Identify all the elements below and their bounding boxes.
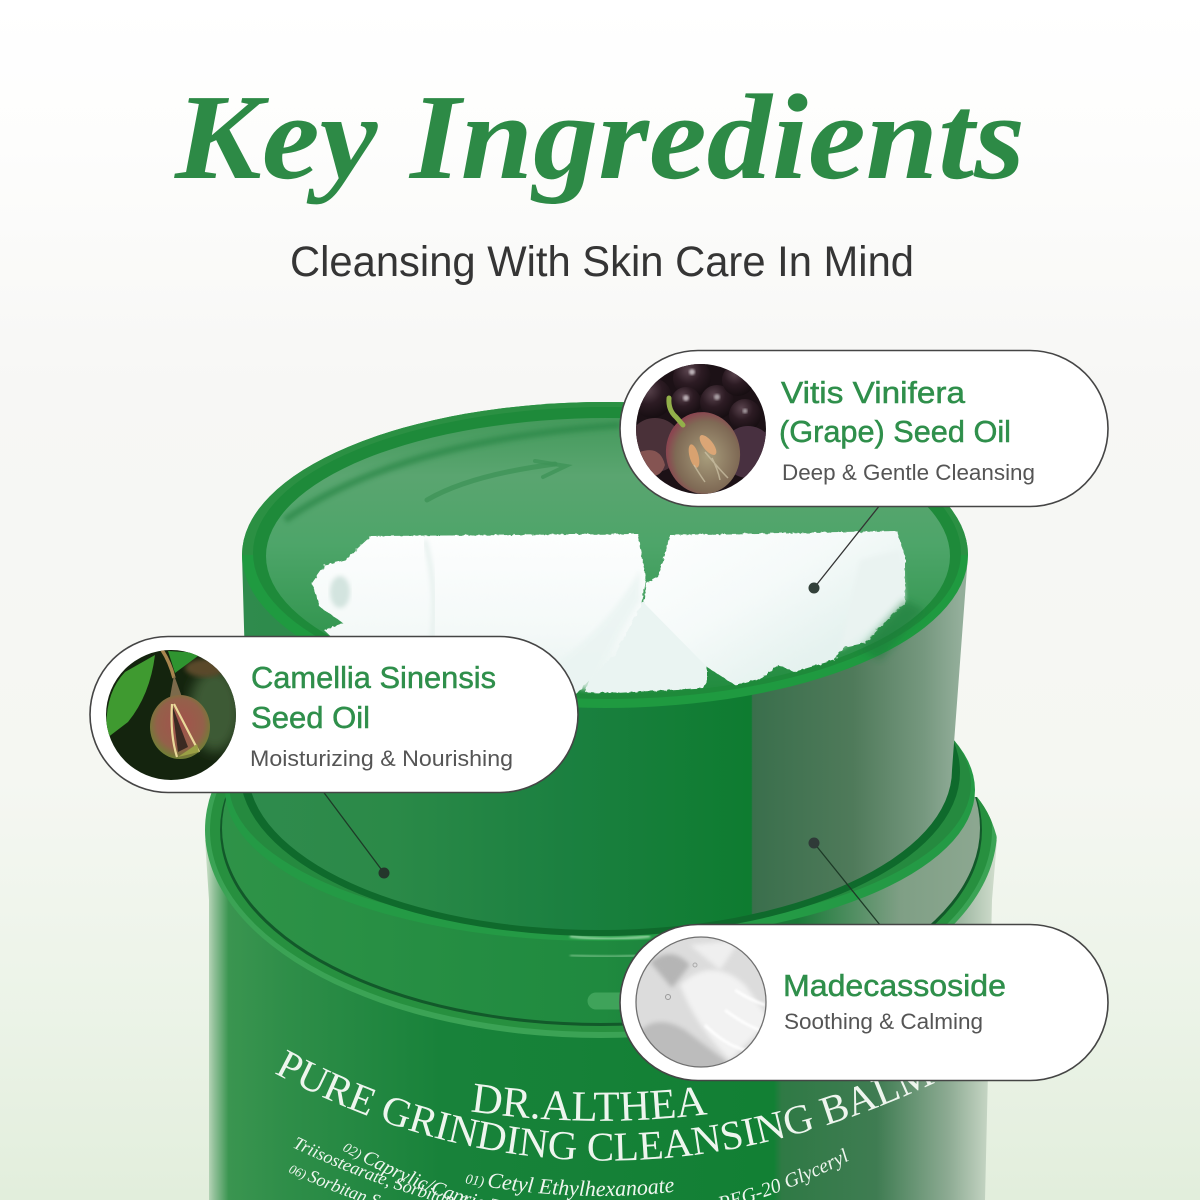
inner floor — [266, 418, 950, 694]
callout: camellia seed oil — [90, 636, 578, 792]
subtitle: Cleansing With Skin Care In Mind — [290, 238, 914, 286]
upper jar body — [242, 555, 968, 930]
ingredient list: 01) Cetyl Ethylhexanoate — [466, 1174, 674, 1200]
benefit: Moisturizing & Nourishing — [250, 746, 513, 771]
jar neck ring — [225, 639, 975, 941]
product name: PURE GRINDING CLEANSING BALM — [275, 1050, 935, 1161]
lower jar body — [205, 840, 997, 1200]
title: Key Ingredients — [174, 70, 1025, 205]
balm folds — [330, 540, 925, 690]
embossed arrow — [427, 461, 566, 500]
balm chunks — [312, 531, 905, 693]
icon: cream texture photo — [636, 937, 770, 1075]
benefit: Soothing & Calming — [784, 1009, 983, 1034]
neck highlights — [570, 936, 650, 939]
leader line: grape — [808, 505, 880, 594]
callout: madecassoside — [620, 924, 1108, 1080]
brand name: DR.ALTHEA — [471, 1084, 708, 1121]
icon: camellia seed photo — [106, 650, 241, 780]
icon: grapes photo — [636, 364, 766, 494]
callout: camellia seed oil: Seed Oil — [251, 700, 370, 735]
lower label — [275, 1050, 935, 1200]
callout: grape seed oil — [620, 350, 1108, 506]
lower jar rim — [205, 793, 997, 1038]
leader line: camellia — [322, 790, 390, 878]
name: Camellia Sinensis — [251, 660, 496, 695]
ingredient list — [289, 1137, 849, 1200]
callout: grape seed oil: (Grape) Seed Oil — [779, 414, 1011, 449]
name: Vitis Vinifera — [781, 375, 966, 410]
name: Madecassoside — [783, 968, 1006, 1003]
leader line: madecassoside — [808, 838, 880, 925]
upper jar rim — [242, 402, 968, 708]
product jar — [205, 402, 997, 1200]
benefit: Deep & Gentle Cleansing — [782, 460, 1035, 485]
